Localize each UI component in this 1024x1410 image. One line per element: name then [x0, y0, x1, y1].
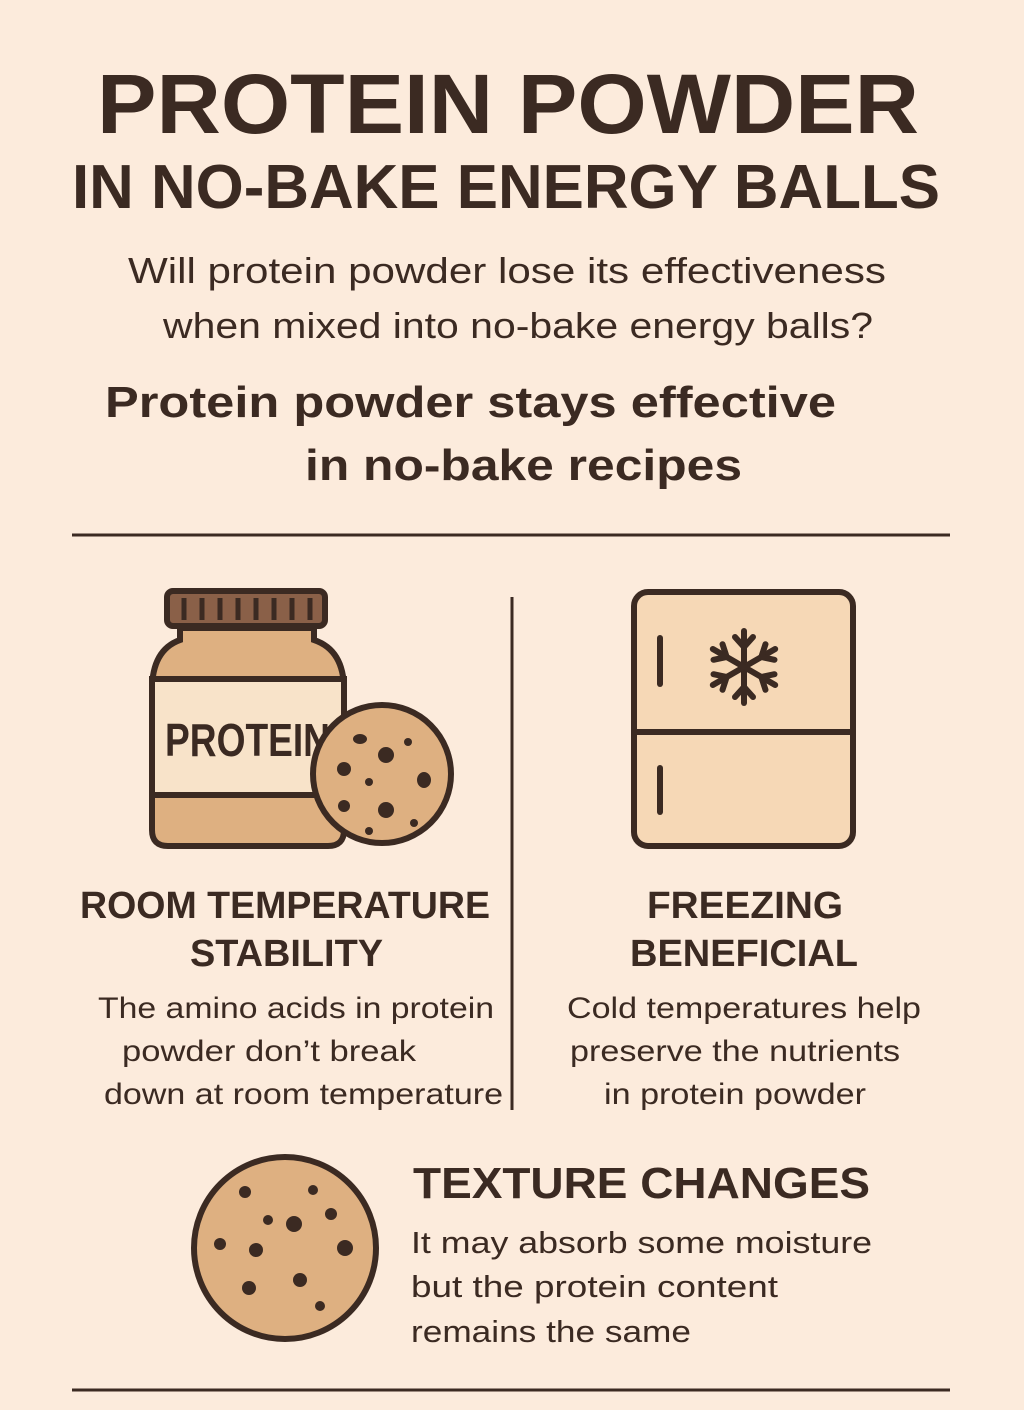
answer heading: Protein powder stays effective	[105, 378, 836, 427]
answer heading: in no-bake recipes	[305, 441, 742, 490]
heading: texture changes: TEXTURE CHANGES	[413, 1159, 870, 1208]
subtitle question	[128, 250, 886, 346]
text: room temperature	[98, 992, 503, 1111]
text: freezing: Cold temperatures help	[567, 992, 921, 1025]
subtitle question: when mixed into no-bake energy balls?	[162, 305, 873, 346]
icon: protein jar with cookie	[152, 591, 451, 846]
text: texture: It may absorb some moisture	[411, 1225, 872, 1260]
text: texture: remains the same	[411, 1314, 691, 1349]
answer heading	[105, 378, 836, 490]
heading: freezing beneficial: FREEZING	[647, 885, 843, 927]
text: room temperature: down at room temperature	[104, 1078, 503, 1111]
text: freezing: in protein powder	[604, 1078, 866, 1111]
heading: room temperature stability	[80, 885, 490, 975]
icon: energy ball cookie	[194, 1157, 376, 1339]
heading: freezing beneficial: BENEFICIAL	[630, 933, 858, 975]
title: IN NO-BAKE ENERGY BALLS	[72, 153, 940, 222]
subtitle question: Will protein powder lose its effectiveness	[128, 250, 886, 291]
icon: freezer	[634, 592, 853, 846]
text: room temperature: The amino acids in protein	[98, 992, 494, 1025]
icon: protein jar with cookie: PROTEIN	[165, 714, 330, 766]
text: freezing: preserve the nutrients	[570, 1035, 900, 1068]
text: texture	[411, 1225, 872, 1349]
heading: freezing beneficial	[630, 885, 858, 975]
text: texture: but the protein content	[411, 1269, 778, 1304]
text: freezing	[567, 992, 921, 1111]
heading: room temperature stability: ROOM TEMPERATURE	[80, 885, 490, 927]
title: PROTEIN POWDER	[97, 57, 919, 151]
text: room temperature: powder don’t break	[122, 1035, 417, 1068]
title	[72, 57, 940, 222]
heading: room temperature stability: STABILITY	[190, 933, 383, 975]
